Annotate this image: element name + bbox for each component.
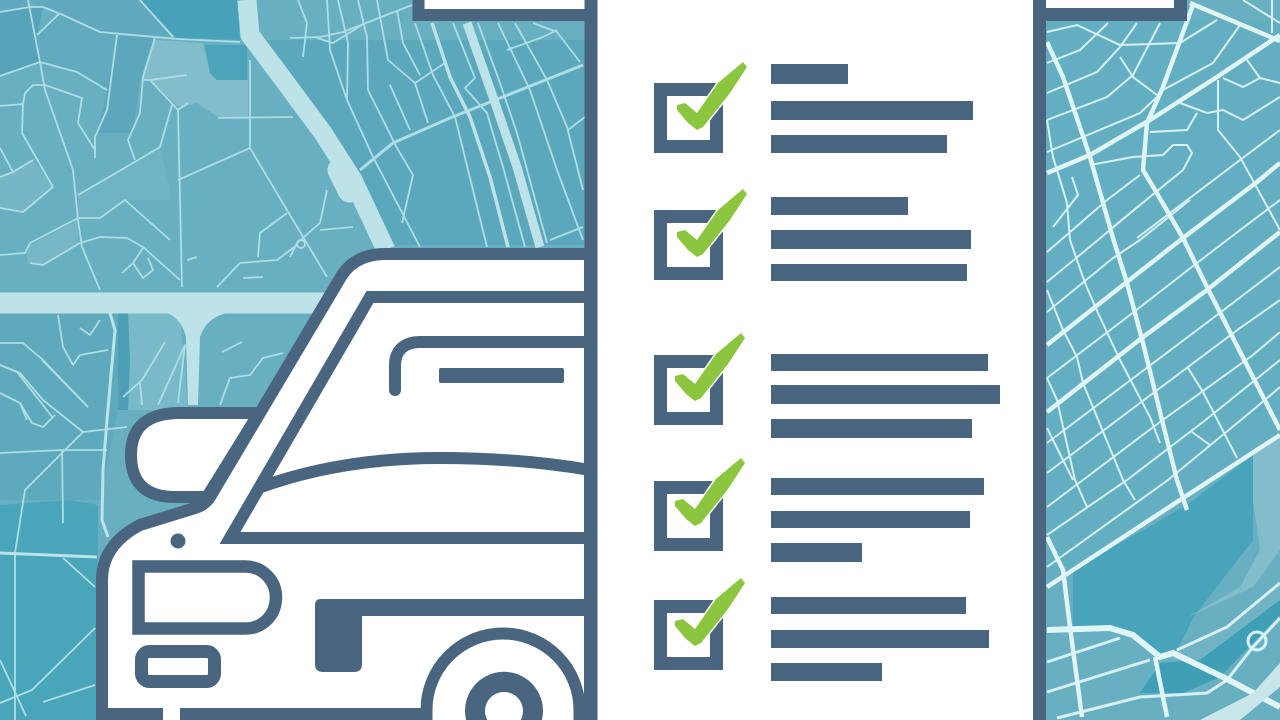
text lines bbox=[771, 354, 1000, 438]
check mark bbox=[675, 458, 745, 526]
checklist item 4 bbox=[660, 458, 984, 562]
checkbox bbox=[660, 90, 716, 146]
headlight bbox=[138, 566, 276, 628]
panel: checklist sheet bbox=[584, 0, 1046, 720]
windshield curve bbox=[258, 458, 590, 488]
bumper line bbox=[97, 708, 425, 720]
text lines bbox=[771, 597, 989, 681]
checkbox bbox=[660, 216, 716, 274]
check mark bbox=[677, 189, 747, 257]
check mark bbox=[677, 62, 747, 130]
text lines bbox=[771, 197, 971, 281]
car body bbox=[102, 254, 590, 720]
sensor dot bbox=[170, 534, 186, 548]
checklist item 3 bbox=[660, 333, 1000, 438]
rear-view mirror outline bbox=[395, 342, 590, 390]
checklist item 1 bbox=[660, 62, 973, 153]
text lines bbox=[771, 64, 973, 153]
check mark bbox=[675, 578, 745, 646]
checkbox bbox=[660, 606, 716, 664]
map streets right bbox=[1047, 0, 1280, 718]
panel: clipboard clips bbox=[412, 0, 1187, 21]
wheel arch bbox=[426, 634, 580, 720]
checkbox bbox=[660, 362, 716, 418]
map main roads left bbox=[0, 0, 540, 557]
check mark bbox=[675, 333, 745, 401]
icon: car bbox=[97, 254, 590, 720]
wheel hub bbox=[465, 672, 543, 720]
checkbox bbox=[660, 488, 716, 544]
text lines bbox=[771, 478, 984, 562]
map main roads right bbox=[1047, 3, 1280, 720]
mirror bar bbox=[439, 368, 564, 383]
checklist item 5 bbox=[660, 578, 989, 681]
windshield bbox=[230, 297, 590, 538]
fog light bbox=[142, 652, 214, 682]
checklist item 2 bbox=[660, 189, 971, 281]
map minor streets left bbox=[0, 0, 585, 720]
side mirror bbox=[131, 413, 259, 497]
door handle bbox=[315, 599, 590, 672]
